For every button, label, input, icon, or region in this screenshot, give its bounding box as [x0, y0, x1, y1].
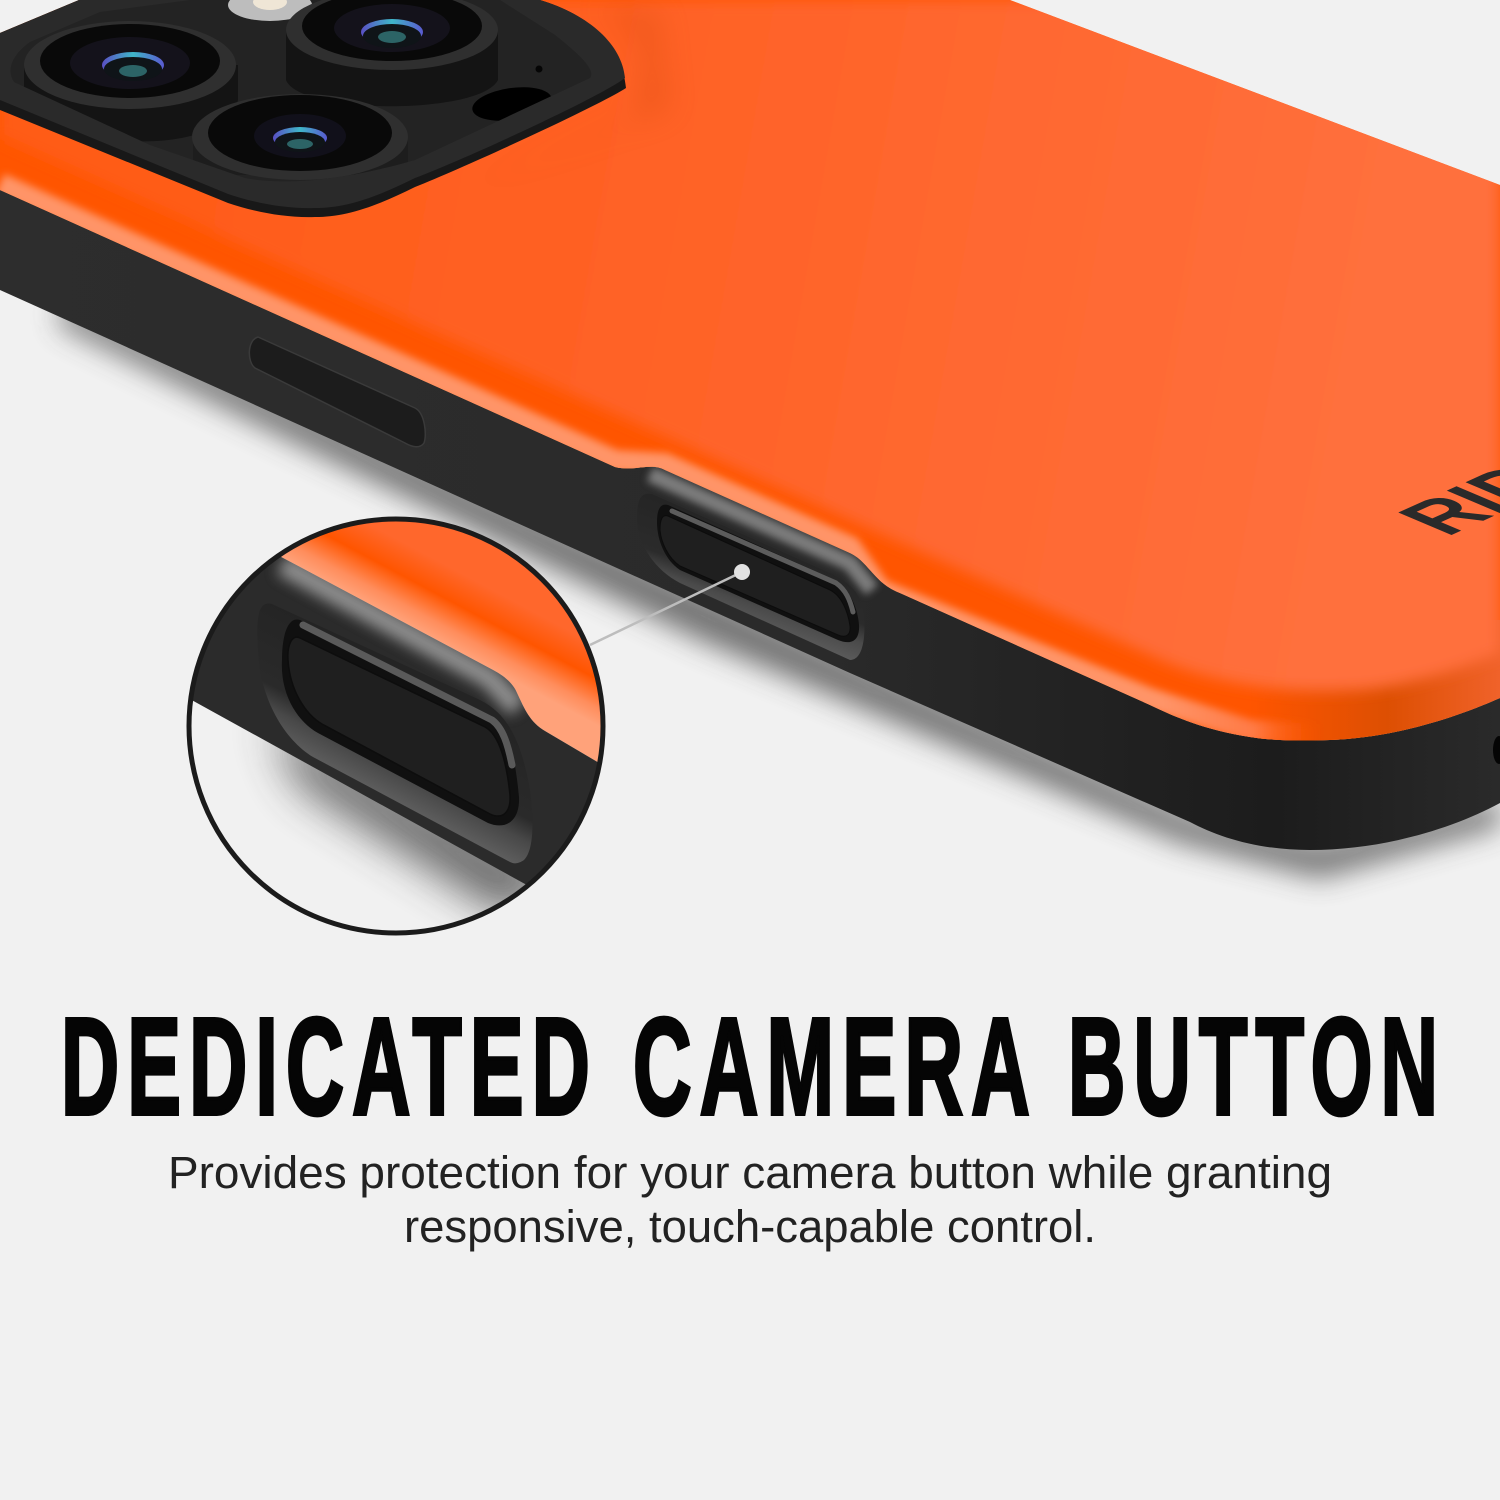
callout dot — [734, 564, 750, 580]
phone case — [0, 0, 1500, 878]
headline word one: DEDICATED — [61, 990, 598, 1144]
magnified shadow — [252, 734, 526, 922]
magnified content — [193, 522, 600, 922]
headline word two: CAMERA — [633, 990, 1038, 1144]
case drop shadow — [60, 300, 1500, 878]
magnified orange panel — [281, 522, 600, 762]
description line two: responsive, touch-capable control. — [404, 1201, 1096, 1252]
description — [168, 1147, 1332, 1252]
bottom lens — [192, 94, 408, 180]
camera module — [0, 0, 626, 217]
magnified button — [282, 619, 519, 825]
volume side button — [249, 337, 425, 447]
left lens — [24, 21, 238, 141]
camera surround — [0, 0, 626, 217]
camera recess floor — [24, 0, 551, 175]
camera button housing — [637, 474, 872, 660]
magnified black wall — [193, 557, 598, 884]
top lens — [286, 0, 498, 106]
description line one: Provides protection for your camera button while granting — [168, 1147, 1332, 1198]
flash — [228, 0, 312, 21]
charging port — [1493, 736, 1500, 764]
leader line — [590, 572, 742, 645]
orange back panel — [0, 0, 1500, 760]
callout ring — [189, 519, 603, 933]
black side wall — [0, 190, 1500, 850]
microphone dot — [536, 66, 542, 72]
headline — [61, 990, 1446, 1144]
magnified housing — [265, 689, 532, 864]
LiDAR sensor — [472, 87, 551, 121]
magnified callout — [186, 516, 606, 936]
